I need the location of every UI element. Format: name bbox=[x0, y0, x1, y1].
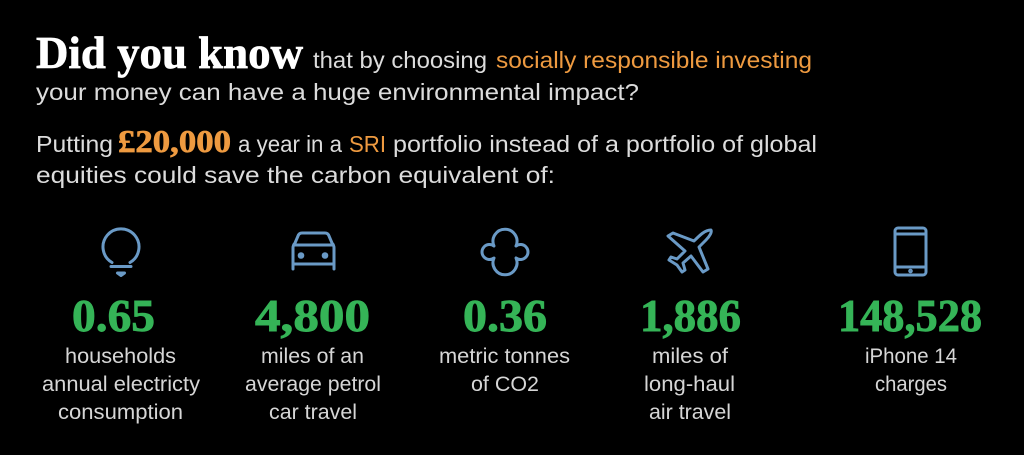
label: of CO2 bbox=[471, 373, 539, 396]
icon: cloud bbox=[482, 229, 528, 275]
heading: socially responsible investing bbox=[496, 47, 812, 73]
label bbox=[865, 345, 957, 396]
label: miles of bbox=[652, 345, 728, 368]
intro text: Putting bbox=[36, 131, 113, 157]
heading: Did you know bbox=[36, 27, 303, 78]
label: households bbox=[65, 345, 176, 368]
stat: air travel bbox=[640, 230, 741, 424]
intro text: £20,000 bbox=[118, 123, 231, 159]
number: 4,800 bbox=[255, 290, 370, 341]
label: miles of an bbox=[261, 345, 364, 368]
icon: light bulb bbox=[103, 229, 139, 276]
label bbox=[439, 345, 570, 396]
label: long-haul bbox=[644, 373, 735, 396]
stat: car travel bbox=[245, 233, 381, 424]
label: air travel bbox=[649, 401, 731, 424]
icon: car bbox=[293, 233, 334, 269]
heading: your money can have a huge environmental impact? bbox=[36, 79, 639, 105]
intro text: a year in a bbox=[238, 131, 342, 157]
label: iPhone 14 bbox=[865, 345, 957, 368]
number: 0.36 bbox=[463, 290, 547, 341]
label bbox=[42, 345, 201, 424]
intro text: equities could save the carbon equivalent of: bbox=[36, 162, 555, 188]
heading bbox=[36, 27, 812, 105]
icon: plane bbox=[668, 230, 711, 272]
label: car travel bbox=[269, 401, 357, 424]
intro text: portfolio instead of a portfolio of global bbox=[393, 131, 817, 157]
heading: that by choosing bbox=[313, 47, 487, 73]
number: 1,886 bbox=[640, 290, 741, 341]
label: metric tonnes bbox=[439, 345, 570, 368]
intro text: SRI bbox=[349, 131, 386, 157]
stat: CO2 bbox=[439, 229, 570, 396]
number: 148,528 bbox=[838, 290, 982, 341]
label: annual electricty bbox=[42, 373, 201, 396]
number: 0.65 bbox=[72, 290, 155, 341]
stat: phone charges bbox=[838, 228, 982, 396]
label bbox=[245, 345, 381, 424]
stat: household electricity bbox=[42, 229, 201, 424]
label: charges bbox=[875, 373, 947, 396]
intro text bbox=[36, 123, 817, 188]
icon: phone bbox=[895, 228, 926, 275]
label bbox=[644, 345, 735, 424]
label: average petrol bbox=[245, 373, 381, 396]
label: consumption bbox=[58, 401, 183, 424]
